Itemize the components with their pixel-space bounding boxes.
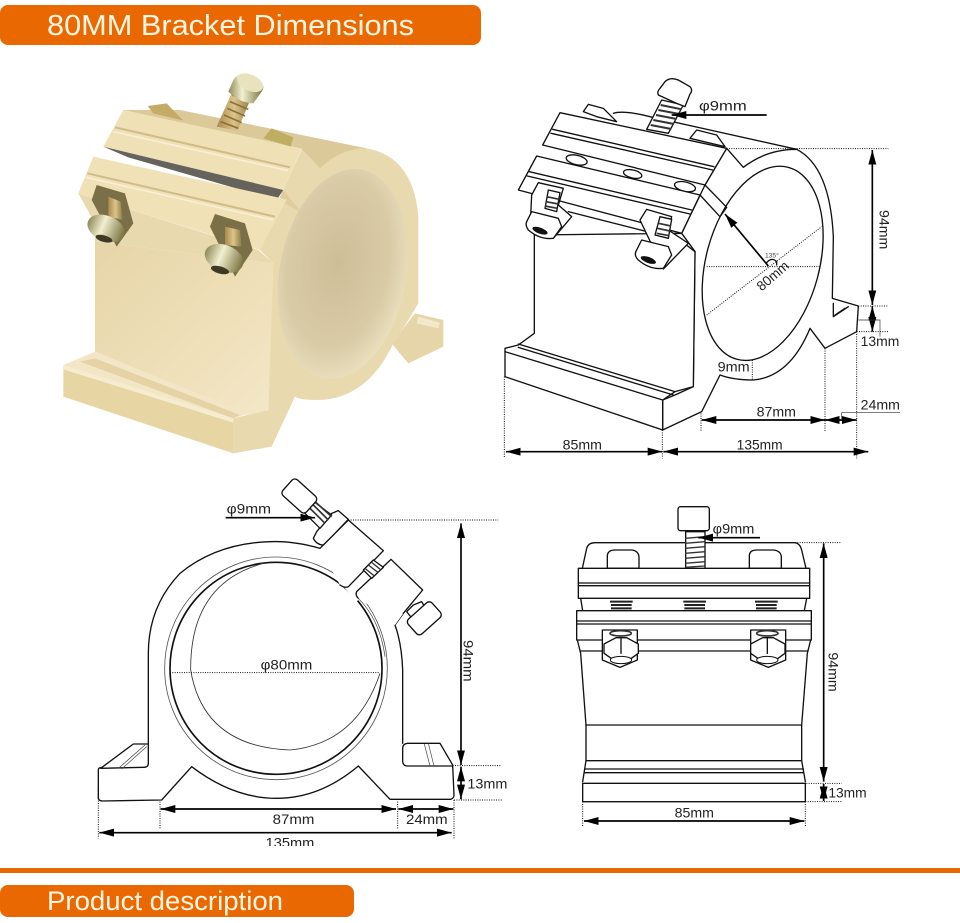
- dotted guides: [98, 520, 502, 838]
- outer bracket outline: [98, 542, 454, 801]
- radius arrow: [725, 214, 768, 266]
- bore: [262, 159, 423, 389]
- front right bolt: [200, 214, 253, 278]
- diagram: front view with dimensions: [577, 507, 867, 827]
- dimension labels: 24mm: [406, 812, 448, 827]
- rear foot: [392, 313, 443, 363]
- footer banner: Product description: [0, 885, 354, 917]
- header banner: 80MM Bracket Dimensions: 80MM Bracket Dimensions: [47, 10, 414, 42]
- diagram: isometric view with dimensions: 9mm: [718, 360, 750, 375]
- gap threads: [610, 602, 778, 608]
- diagram: isometric view with dimensions: 13mm: [861, 334, 899, 349]
- top bolt: [217, 69, 266, 131]
- clamp underside: [78, 193, 273, 263]
- front left bolt: [83, 185, 133, 247]
- cylinder top behind clamps: [123, 110, 367, 168]
- diagram: isometric view with dimensions: 94mm: [876, 210, 891, 249]
- top bolt and nut: [280, 477, 348, 545]
- dimension arrows: [870, 150, 875, 305]
- upper clamp block: [320, 520, 383, 587]
- side face: [95, 242, 273, 415]
- dimension labels: 13mm: [467, 776, 507, 791]
- right bolt: [406, 600, 443, 636]
- right bolt: [635, 209, 688, 269]
- end face backing: [257, 149, 367, 383]
- dotted dimension guides: [504, 149, 888, 458]
- body side face: [505, 233, 695, 430]
- upper clamp: [103, 110, 302, 190]
- top bolt: [647, 79, 692, 133]
- end face: [233, 148, 418, 453]
- lower clamp plate: [577, 611, 811, 640]
- lower clamp: [78, 157, 287, 250]
- footer banner: Product description: Product description: [47, 886, 283, 916]
- dimension labels: φ9mm: [713, 521, 754, 536]
- header banner: 80MM Bracket Dimensions: [0, 5, 481, 45]
- dimension labels: φ9mm: [699, 99, 747, 114]
- section divider rule: [0, 868, 960, 873]
- upper clamp: [543, 113, 727, 185]
- foot top: [63, 352, 248, 418]
- dimension labels: 87mm: [273, 812, 314, 827]
- body silhouette: [577, 543, 811, 782]
- upper clamp plate: [578, 568, 810, 598]
- middle bolt thread: [363, 560, 383, 578]
- diagram: end view with dimensions: [98, 477, 507, 851]
- diagram: front view with dimensions: 85mm: [675, 805, 714, 820]
- lower clamp: [518, 156, 700, 233]
- diagram: isometric view with dimensions: 85mm: [563, 437, 602, 452]
- diagram: isometric view with dimensions: [504, 79, 900, 458]
- right nut: [751, 630, 786, 667]
- rear cylinder top: [613, 112, 797, 149]
- diagram: front view with dimensions: 13mm: [828, 786, 867, 801]
- inner rings: [165, 557, 387, 780]
- foot notch detail: [833, 303, 848, 317]
- lower clamp block: [356, 559, 423, 657]
- body end face: [663, 148, 858, 430]
- dimension labels: φ9mm: [227, 501, 271, 516]
- left nut: [602, 630, 638, 667]
- diagram: isometric view with dimensions: 87mm: [757, 405, 796, 420]
- top bolt: [678, 507, 709, 569]
- diagram: isometric view with dimensions: 24mm: [861, 397, 900, 412]
- diagram: isometric view with dimensions: 135°: [765, 251, 779, 259]
- clamp gap: [103, 147, 283, 200]
- dimension labels: φ80mm: [261, 657, 312, 672]
- diagram: isometric view with dimensions: 80mm: [754, 258, 792, 294]
- diagram: front view with dimensions: 94mm: [826, 652, 841, 692]
- rear studs: [607, 550, 639, 568]
- dimension labels: 135mm: [266, 836, 314, 851]
- bore ellipse: [682, 153, 843, 374]
- dimension labels: 94mm: [460, 640, 475, 682]
- dimension arrows: [458, 523, 463, 765]
- rear nuts: [583, 104, 617, 122]
- clamp underside lip: [534, 212, 695, 252]
- dimension labels: [227, 501, 507, 851]
- dotted guides: [583, 543, 842, 827]
- rear nuts: [148, 103, 183, 121]
- clamp edge to face: [700, 185, 727, 217]
- left bolt: [526, 183, 572, 239]
- photo: gold spindle bracket: [63, 69, 443, 453]
- dimension arrows: [821, 543, 826, 782]
- white gap at clamp split: [341, 578, 365, 602]
- foot front: [63, 365, 233, 453]
- diagram: isometric view with dimensions: 135mm: [737, 437, 783, 452]
- gap nuts: [565, 153, 588, 167]
